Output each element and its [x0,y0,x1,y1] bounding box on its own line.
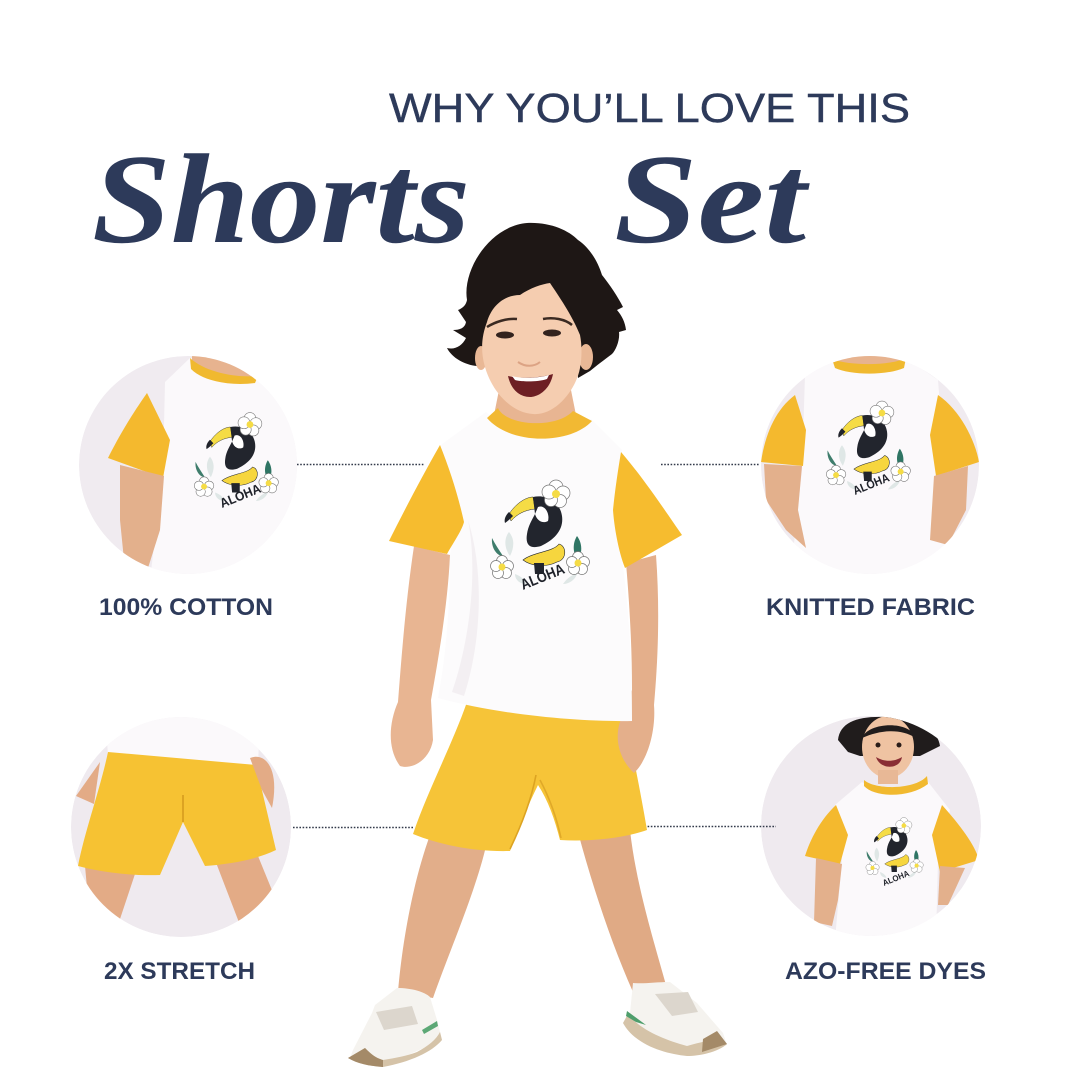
panel: knitted fabric detail circle [761,356,979,548]
title: set: Set [614,128,810,270]
left leg [398,835,486,998]
t-shirt body [438,412,632,721]
hair [447,223,626,378]
ears [579,344,593,370]
left shoe [350,988,442,1066]
title: why you'll love this: WHY YOU’LL LOVE THIS [389,85,910,131]
smile [508,374,553,397]
label: knitted fabric: KNITTED FABRIC [766,594,975,621]
title: shorts: Shorts [92,128,470,270]
neck [492,385,578,425]
connector: stretch [293,826,414,828]
connector: cotton [297,464,425,466]
panel: knitted fabric detail circle: ALOHA [851,470,892,498]
label: azo-free dyes: AZO-FREE DYES [785,958,986,985]
print: toucan [490,480,590,584]
label: 2x stretch: 2X STRETCH [104,958,255,985]
print: aloha: ALOHA [518,561,567,594]
figure: smiling child wearing the shorts set [348,223,727,1067]
right sleeve [613,452,682,568]
nose [518,362,540,366]
panel: cotton detail circle [79,356,279,568]
shorts [413,702,647,851]
right leg [578,830,666,992]
panel: stretch detail circle [71,746,291,937]
connector: azo-free [638,826,776,828]
connector: knitted [661,464,760,466]
left sleeve [389,445,464,554]
eyes [496,332,514,338]
right shoe [623,982,727,1055]
panel: azo-free dyes detail circle: ALOHA [881,868,911,888]
left arm [391,546,450,767]
brows [487,319,517,327]
label: 100% cotton: 100% COTTON [99,594,273,621]
panel: azo-free dyes detail circle [761,716,981,940]
collar [487,408,592,439]
panel: cotton detail circle: ALOHA [218,481,264,511]
face [482,283,582,414]
right arm [618,555,658,773]
